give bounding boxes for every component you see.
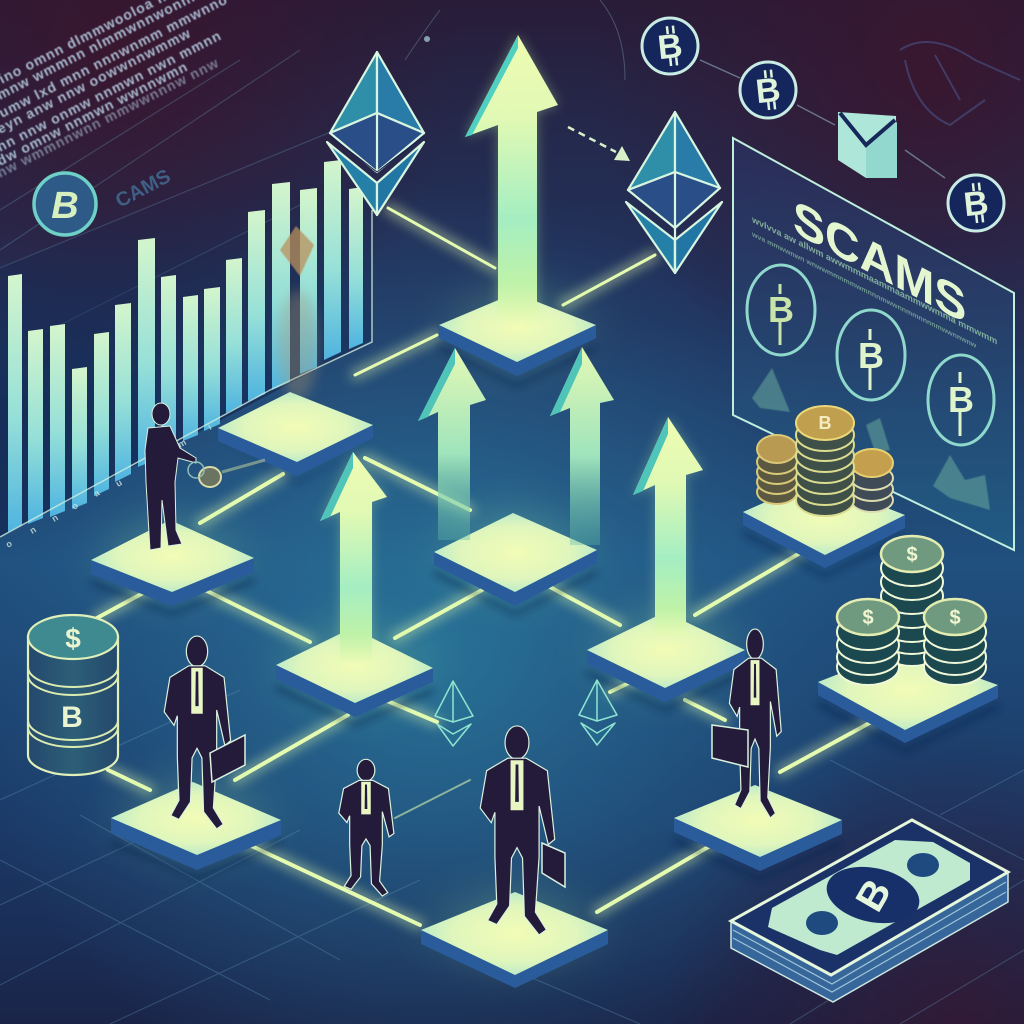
arrow: lower right	[633, 417, 703, 635]
figure: small man centre left	[339, 759, 394, 896]
icon: panel coin 2: B	[858, 335, 884, 376]
figure: man with briefcase left	[164, 636, 245, 829]
platform shadows	[91, 345, 998, 881]
chart tick labels: o	[4, 538, 14, 550]
platform 1	[218, 392, 373, 476]
coin links	[700, 60, 945, 178]
small dashed arrow	[568, 127, 630, 161]
small token in hand	[188, 460, 265, 487]
coins: teal stacks	[837, 536, 986, 685]
icon: panel coin 3: B	[948, 379, 974, 420]
icon: ethereum small left	[435, 681, 473, 746]
dollar mark left: $	[862, 607, 874, 629]
icon: panel coin 1	[747, 265, 815, 355]
barrel bitcoin: B	[61, 701, 83, 734]
barrel dollar: $	[65, 623, 81, 654]
platform 5	[91, 520, 254, 606]
dollar mark top: $	[906, 544, 918, 566]
panel: scams	[733, 138, 1014, 550]
figure: man with extended arm	[145, 403, 265, 550]
icon: bitcoin coin top 2: B	[754, 71, 782, 111]
icon: bitcoin coin top 1	[642, 18, 698, 74]
platform 6	[276, 628, 433, 717]
dollar mark right: $	[949, 607, 961, 629]
connector lines	[97, 208, 875, 925]
icon: bitcoin coin top 1: B	[656, 27, 684, 67]
chart tick labels: u	[114, 477, 124, 489]
icon: ethereum right	[626, 112, 722, 273]
figure: man with briefcase right	[712, 629, 781, 818]
screen text block: top left: nw wmmnnwnn mmwwnnnw nnw	[0, 54, 222, 181]
arrow: upper right	[550, 347, 614, 545]
platform 3	[434, 513, 597, 606]
chart tick labels: n	[28, 524, 38, 536]
chart tick labels: n	[50, 512, 60, 524]
coin mark: B	[818, 413, 832, 433]
banknote mark: B	[848, 872, 900, 919]
icon: panel coin 2	[837, 310, 905, 400]
platform 10	[674, 785, 842, 871]
arrow: large centre	[465, 35, 558, 318]
platform 11	[421, 892, 608, 988]
icon: bitcoin coin top 2	[740, 62, 796, 118]
chart tick labels: i	[206, 422, 213, 432]
chart tick labels	[4, 422, 213, 550]
platform glows	[91, 293, 745, 960]
chart tick labels: a	[92, 487, 102, 499]
platform 7	[587, 612, 745, 702]
figure: man centre front	[480, 726, 565, 935]
panel dim icons	[752, 368, 990, 510]
platform 2	[439, 293, 596, 376]
icon: barrel	[28, 615, 118, 775]
chart axis	[0, 210, 372, 537]
icon: cube envelope	[838, 112, 897, 178]
screen text block: top left	[0, 0, 230, 181]
platform 4	[743, 480, 905, 568]
icon: banknote stack	[731, 820, 1008, 1002]
icon: ethereum small right	[579, 680, 617, 745]
icon: panel coin 1: B	[768, 289, 794, 330]
chart tick labels: m	[176, 437, 188, 450]
panel caption lines: wvlvva aw allwm awwmmmaammaammwwmma mmwmm	[751, 214, 997, 347]
screen text block: top left: eyn anw nnw oowwnnwmmw	[0, 24, 194, 137]
icon: bitcoin coin top 3: B	[962, 184, 990, 224]
platform 8	[818, 650, 998, 743]
chart backdrop	[0, 115, 372, 537]
panel caption lines: wva mmwwnwn wnwwmmnmmwmnnnmwwnnmmnnnnmwwnnwnw	[751, 229, 976, 350]
screen text block: top left: nn nnw onmw nnmwn nwn mmnn	[0, 27, 224, 155]
arrow: upper left	[418, 348, 486, 540]
coins: gold stacks	[757, 406, 893, 516]
bar chart	[8, 160, 363, 532]
faint hand sketch	[900, 42, 1020, 125]
icon: bitcoin coin top 3	[948, 175, 1004, 231]
chart label: CAMS	[112, 165, 174, 212]
icon: ethereum left	[327, 52, 424, 215]
platform 9	[111, 782, 281, 870]
gold object on chart	[278, 226, 318, 400]
chart tick labels: o	[70, 500, 80, 512]
icon: panel coin 3	[928, 355, 994, 445]
arrow: lower left	[320, 452, 387, 660]
heading: scams: SCAMS	[793, 189, 966, 334]
icon: bitcoin coin left: B	[51, 185, 79, 227]
icon: bitcoin coin left	[34, 173, 96, 235]
